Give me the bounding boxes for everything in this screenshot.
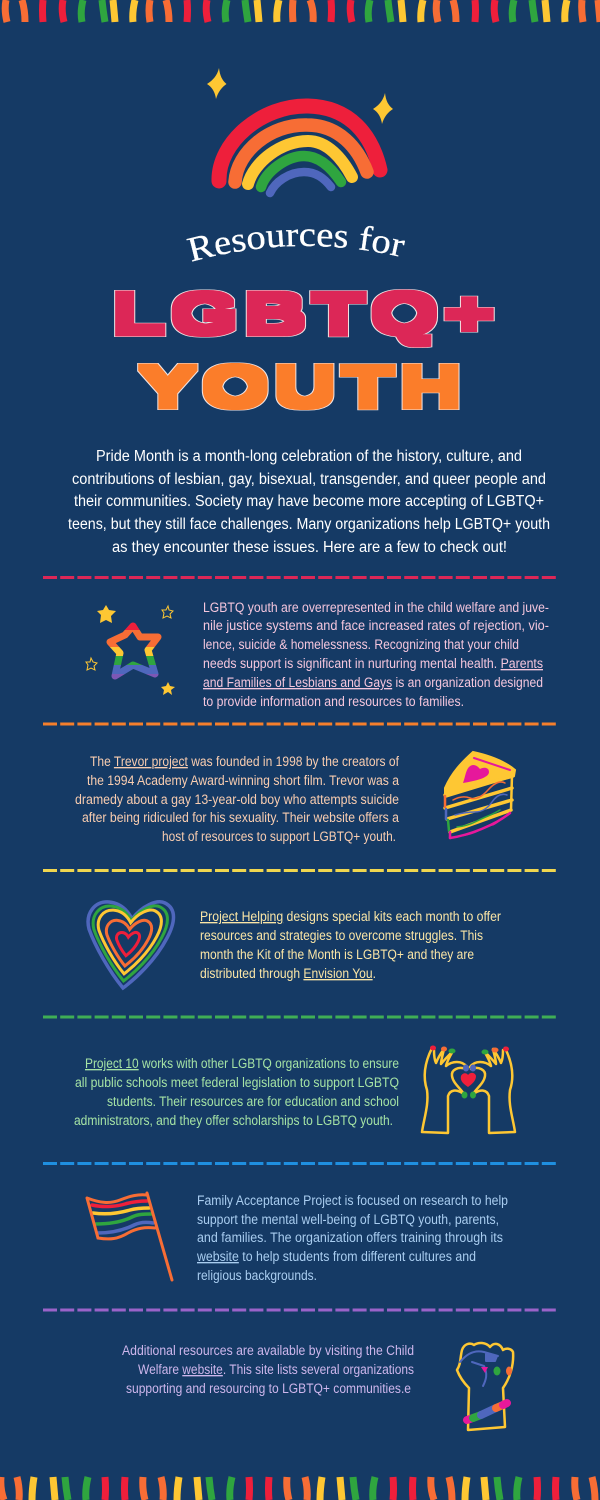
text block: Project Helping: Project Helping designs special kits each month to offer bbox=[200, 909, 501, 924]
panel: PFLAG bbox=[86, 600, 549, 709]
text block: Project Helping: distributed through Envision You. bbox=[200, 966, 376, 981]
intro paragraph: their communities. Society may have become more accepting of LGBTQ+ bbox=[74, 493, 544, 510]
text block: Project Helping: month the Kit of the Month is LGBTQ+ and they are bbox=[200, 947, 474, 962]
title: YOUTH: YOUTH bbox=[140, 355, 468, 419]
text block: Trevor Project: host of resources to support LGBTQ+ youth. bbox=[162, 829, 396, 844]
icon: rainbow cake slice bbox=[445, 752, 515, 838]
text block: Trevor Project: The Trevor project was founded in 1998 by the creators of bbox=[90, 754, 399, 769]
text block: Project 10 bbox=[74, 1056, 399, 1128]
text block: Trevor Project: the 1994 Academy Award-winning short film. Trevor was a bbox=[87, 773, 399, 788]
text block: Family Acceptance Project: support the mental well-being of LGBTQ youth, parents, bbox=[197, 1212, 499, 1227]
text block: Family Acceptance Project: website to help students from different cultures and bbox=[196, 1249, 476, 1264]
text block: Family Acceptance Project: religious backgrounds. bbox=[197, 1268, 317, 1283]
panel: Project Helping bbox=[88, 902, 501, 988]
heading: Resources for: Resources for bbox=[186, 226, 405, 262]
title: LGBTQ+: LGBTQ+ bbox=[113, 282, 501, 346]
text block: PFLAG: LGBTQ youth are overrepresented in the child welfare and juve- bbox=[203, 600, 549, 615]
panel: Trevor Project bbox=[75, 752, 515, 844]
intro paragraph: teens, but they still face challenges. Many organizations help LGBTQ+ youth bbox=[68, 516, 550, 533]
bottom rainbow stripe border bbox=[1, 1477, 595, 1500]
text block: PFLAG: needs support is significant in nurturing mental health. Parents bbox=[203, 656, 543, 671]
panel: Family Acceptance Project bbox=[87, 1193, 508, 1283]
panel: Child Welfare bbox=[122, 1343, 513, 1430]
text block: Project 10: all public schools meet federal legislation to support LGBTQ bbox=[75, 1075, 399, 1090]
text block: Child Welfare: supporting and resourcing to LGBTQ+ communities.e bbox=[126, 1381, 411, 1396]
text block: PFLAG: lence, suicide & homelessness. Recognizing that your child bbox=[203, 637, 519, 652]
icon: raised fist with bracelet bbox=[457, 1343, 513, 1430]
dashed dividers bbox=[43, 578, 557, 1310]
text block: PFLAG bbox=[203, 600, 549, 709]
intro paragraph: contributions of lesbian, gay, bisexual, transgender, and queer people and bbox=[72, 471, 546, 488]
text block: Project 10: students. Their resources are for education and school bbox=[107, 1094, 399, 1109]
icon: rainbow flag bbox=[87, 1193, 172, 1280]
text block: PFLAG: and Families of Lesbians and Gays is an organization designed bbox=[203, 675, 543, 690]
text block: Child Welfare bbox=[122, 1343, 414, 1396]
text block: Project 10: Project 10 works with other LGBTQ organizations to ensure bbox=[85, 1056, 399, 1071]
text block: PFLAG: nile justice systems and face increased rates of rejection, vio- bbox=[203, 618, 549, 633]
text block: Trevor Project: dramedy about a gay 13-year-old boy who attempts suicide bbox=[75, 792, 399, 807]
panel: Project 10 bbox=[74, 1046, 515, 1133]
text block: Project Helping: resources and strategies to overcome struggles. This bbox=[200, 928, 483, 943]
icon: rainbow bbox=[219, 106, 380, 193]
top rainbow stripe border bbox=[5, 0, 600, 22]
text block: Family Acceptance Project bbox=[196, 1193, 508, 1283]
intro paragraph: as they encounter these issues. Here are a few to check out! bbox=[112, 539, 507, 556]
icon: hands forming heart bbox=[422, 1046, 515, 1133]
text block: Project 10: administrators, and they offer scholarships to LGBTQ youth. bbox=[74, 1113, 393, 1128]
text block: Family Acceptance Project: Family Acceptance Project is focused on research to help bbox=[197, 1193, 508, 1208]
text block: Trevor Project: after being ridiculed for his sexuality. Their website offers a bbox=[82, 810, 399, 825]
icon: rainbow concentric heart bbox=[88, 902, 174, 988]
icon: sparkles bbox=[207, 68, 393, 124]
text block: Project Helping bbox=[200, 909, 501, 981]
intro paragraph bbox=[68, 448, 550, 556]
text block: Trevor Project bbox=[75, 754, 399, 844]
text block: Child Welfare: Welfare website. This site lists several organizations bbox=[138, 1362, 414, 1377]
text block: Child Welfare: Additional resources are available by visiting the Child bbox=[122, 1343, 414, 1358]
text block: PFLAG: to provide information and resources to families. bbox=[203, 694, 464, 709]
icon: rainbow star with small stars bbox=[86, 605, 175, 695]
intro paragraph: Pride Month is a month-long celebration of the history, culture, and bbox=[96, 448, 522, 465]
text block: Family Acceptance Project: and families. The organization offers training through its bbox=[197, 1230, 503, 1245]
